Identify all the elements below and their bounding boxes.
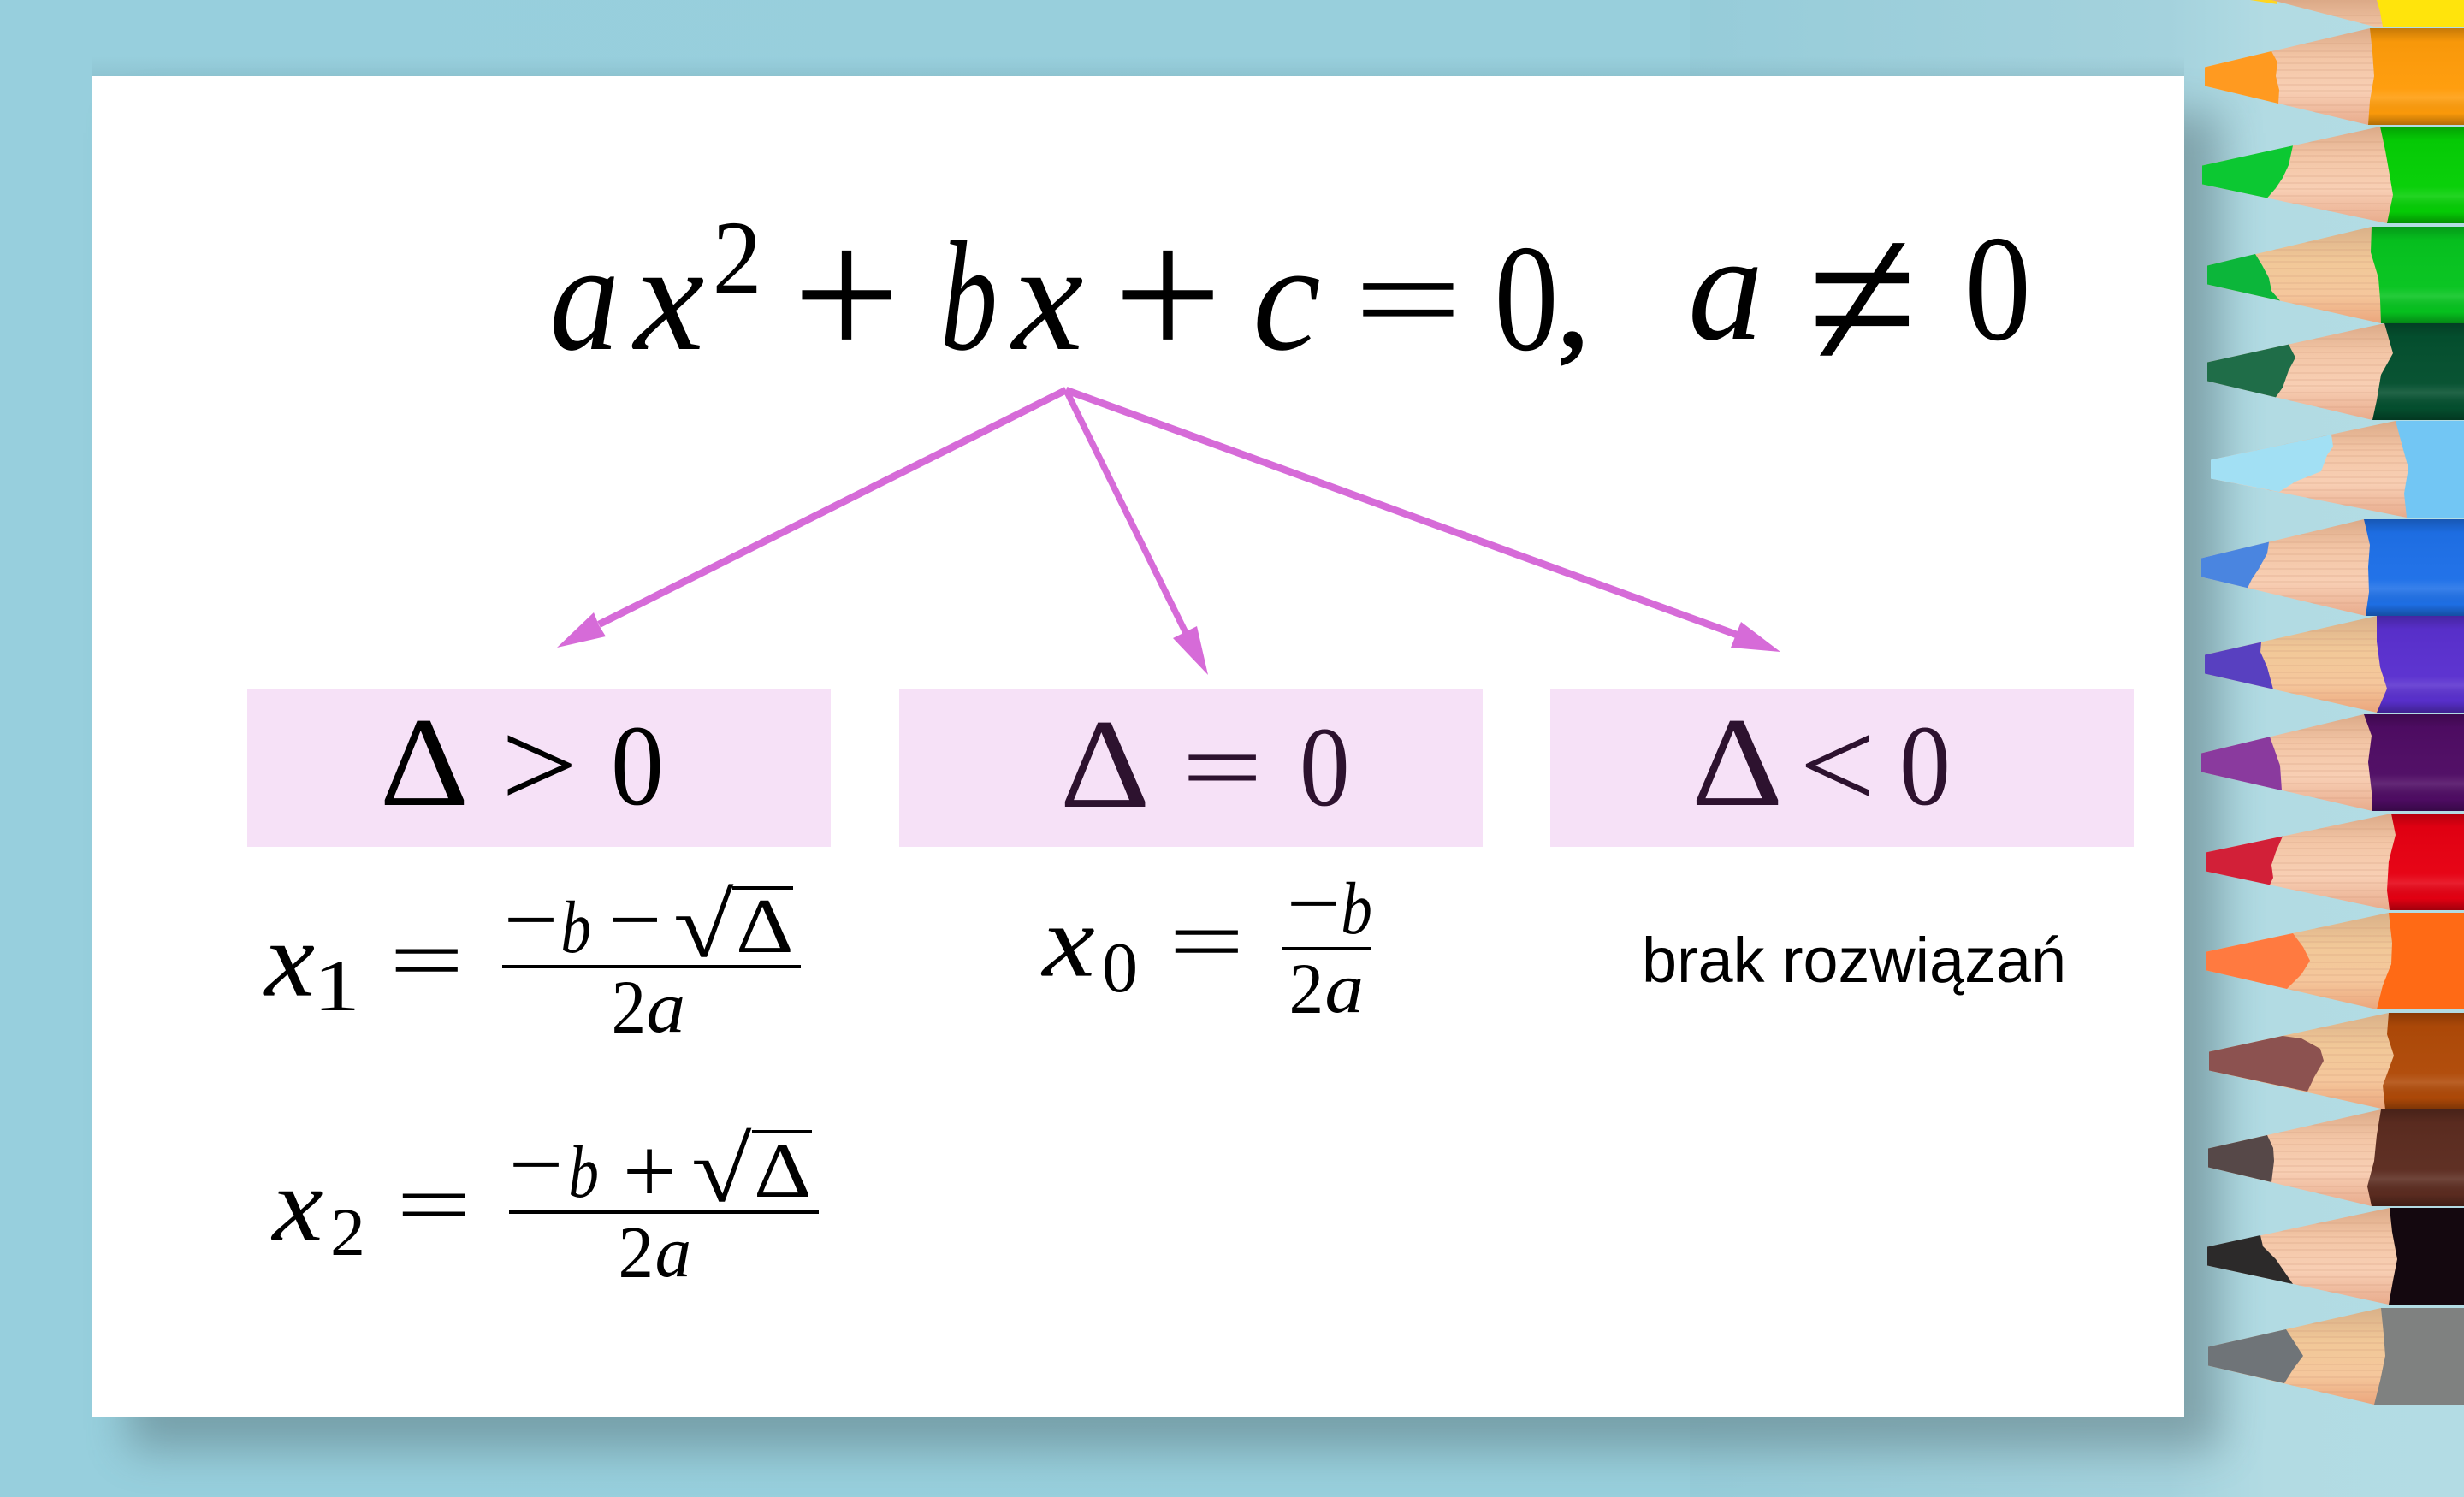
formula: x1: = bbox=[389, 910, 464, 1010]
main equation: = bbox=[1353, 227, 1463, 372]
formula: x0: a bbox=[1324, 949, 1364, 1028]
pencil: brown bbox=[2209, 1013, 2464, 1109]
pencil: blue bbox=[2201, 519, 2464, 616]
formula: x2: 2 bbox=[330, 1194, 365, 1270]
panel: delta less than zero: 0 bbox=[1899, 701, 1951, 830]
formula: x2: √ bbox=[691, 1119, 752, 1222]
formula: x0: b bbox=[1341, 868, 1372, 950]
panel: delta equal zero: Δ bbox=[1059, 694, 1151, 835]
text: no solutions: brak rozwiązań bbox=[1642, 925, 2066, 996]
formula: x0: 2 bbox=[1289, 948, 1324, 1028]
main equation: b bbox=[940, 210, 998, 383]
panel: delta equal zero: 0 bbox=[1300, 704, 1350, 831]
pencil: purple bbox=[2201, 714, 2464, 811]
arrow: to delta less than zero bbox=[1066, 390, 1780, 652]
panel: delta less than zero bbox=[1550, 689, 2134, 847]
formula: x0 bbox=[1040, 856, 1372, 1028]
panel: delta greater than zero: > bbox=[501, 696, 578, 835]
main equation: c bbox=[1253, 211, 1321, 383]
pencil: dark green bbox=[2207, 323, 2464, 420]
formula: x1: − bbox=[504, 873, 558, 967]
formula: x0: − bbox=[1287, 856, 1341, 951]
panel: delta less than zero: Δ bbox=[1691, 693, 1784, 833]
formula: x1: b bbox=[560, 887, 591, 969]
pencil: yellow bbox=[2250, 0, 2464, 27]
formula: x1: a bbox=[646, 967, 685, 1048]
main equation: , bbox=[1557, 236, 1590, 372]
main equation: 0 bbox=[1494, 214, 1559, 382]
main equation: a bbox=[1688, 204, 1763, 372]
pencil: gray bbox=[2208, 1308, 2464, 1405]
main equation: x bbox=[1010, 210, 1083, 382]
panel: delta greater than zero bbox=[247, 689, 831, 847]
main equation: a bbox=[549, 211, 619, 383]
arrow: to delta equal zero bbox=[1066, 390, 1208, 675]
formula: x2: x bbox=[270, 1145, 323, 1263]
formula: x1: Δ bbox=[736, 884, 794, 969]
formula: x1: 1 bbox=[313, 945, 360, 1027]
main equation: 0 bbox=[1964, 204, 2031, 372]
formula: x2: = bbox=[396, 1155, 472, 1254]
main equation: + bbox=[1113, 188, 1223, 400]
pencil: light green bbox=[2207, 227, 2464, 323]
formula: x0: 0 bbox=[1102, 928, 1138, 1008]
formula: x0: x bbox=[1040, 885, 1095, 998]
pencil: indigo bbox=[2205, 616, 2464, 713]
card shadow bbox=[128, 113, 2220, 1450]
pencil: dark brown bbox=[2208, 1109, 2464, 1206]
formula: x2: a bbox=[655, 1210, 691, 1293]
formula: x1: √ bbox=[673, 875, 734, 977]
pencil: orange bbox=[2205, 28, 2464, 125]
formula: x2: − bbox=[509, 1117, 563, 1212]
formula: x1: 2 bbox=[612, 966, 646, 1050]
pencil: red bbox=[2206, 814, 2464, 910]
main equation: x bbox=[631, 210, 704, 383]
formula: x1: x bbox=[263, 901, 315, 1020]
panel: delta greater than zero: 0 bbox=[611, 702, 664, 830]
pencil: green bbox=[2202, 127, 2464, 223]
formula: x2: b bbox=[568, 1132, 599, 1214]
formula: x0: = bbox=[1169, 891, 1245, 991]
pencil: black bbox=[2207, 1208, 2464, 1305]
pencils column bbox=[2201, 0, 2464, 1405]
pencil: sky blue bbox=[2211, 421, 2464, 518]
white card bbox=[92, 76, 2184, 1417]
main equation bbox=[549, 181, 2031, 417]
main equation: ≠ bbox=[1808, 181, 1917, 417]
panel: delta equal zero bbox=[899, 689, 1483, 847]
formula: x2 bbox=[270, 1117, 819, 1293]
panel: delta equal zero: = bbox=[1182, 710, 1263, 825]
arrow: to delta greater than zero bbox=[557, 390, 1066, 648]
formula: x2: 2 bbox=[618, 1211, 654, 1293]
formula: x1 bbox=[263, 872, 801, 1050]
pencil: orange red bbox=[2206, 913, 2464, 1009]
formula: x2: + bbox=[623, 1118, 676, 1223]
main equation: + bbox=[792, 189, 901, 400]
panel: delta greater than zero: Δ bbox=[380, 691, 469, 832]
main equation: 2 bbox=[713, 199, 762, 317]
formula: x2: Δ bbox=[754, 1128, 812, 1214]
panel: delta less than zero: < bbox=[1799, 695, 1875, 836]
formula: x1: − bbox=[608, 872, 661, 967]
